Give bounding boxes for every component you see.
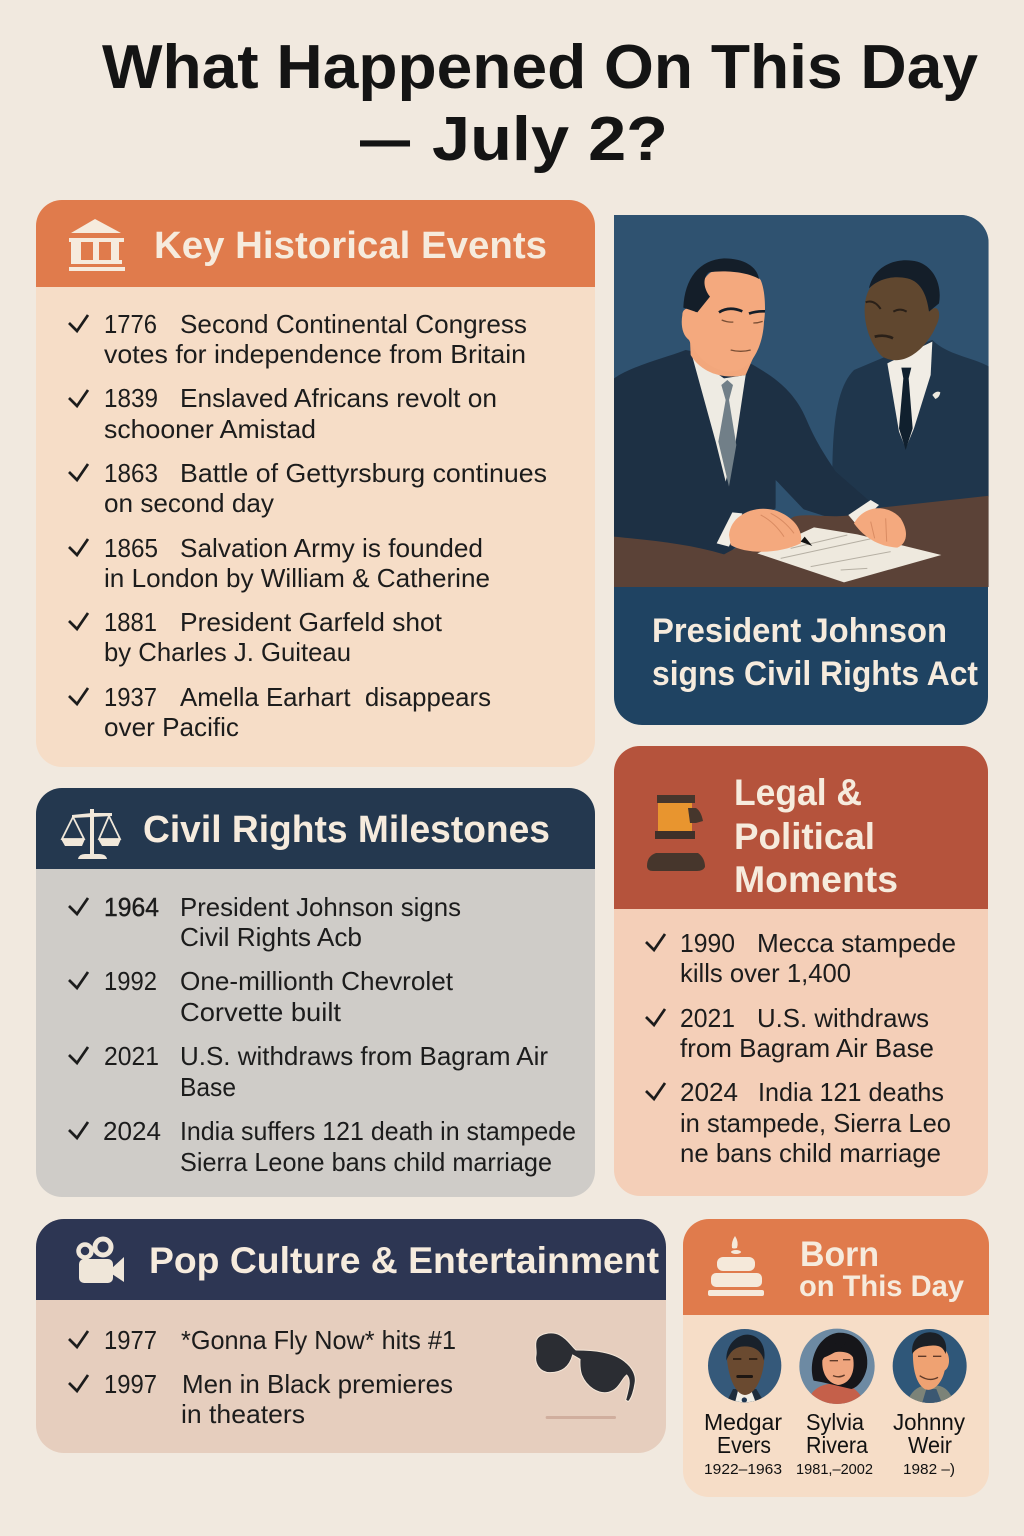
name: Johnny Weir: 1982 –) [903, 1461, 955, 1478]
panel header: key historical events [36, 200, 595, 287]
panel header: pop culture and entertainment [36, 1219, 666, 1300]
event list: civil rights milestones: Corvette built [180, 997, 342, 1027]
event list: key historical events: 1839 [104, 383, 158, 413]
panel: pop culture and entertainment [36, 1219, 666, 1453]
name: Medgar Evers: Medgar [704, 1409, 782, 1435]
event list: key historical events: Battle of Gettyrsburg continues [180, 458, 547, 488]
title: What Happened On This Day [102, 33, 979, 102]
icon: film camera [78, 1239, 124, 1283]
heading: pop culture and entertainment: Pop Culture & Entertainment [149, 1240, 659, 1281]
table [614, 496, 989, 587]
heading: born on this day: Born [800, 1235, 879, 1274]
name: Sylvia Rivera: 1981,–2002 [796, 1461, 873, 1478]
heading: born on this day [799, 1235, 964, 1303]
event list: civil rights milestones: 2021 [104, 1041, 159, 1071]
portrait: Johnny Weir [891, 1327, 968, 1406]
event list: civil rights milestones: Civil Rights Acb [180, 922, 362, 952]
person: Sylvia Rivera [796, 1327, 876, 1478]
event list: pop culture: *Gonna Fly Now* hits #1 [181, 1325, 456, 1355]
heading: legal and political moments: Moments [734, 859, 898, 900]
heading: legal and political moments: Political [734, 816, 875, 857]
event list: legal and political moments [646, 928, 956, 1168]
title: — [360, 105, 410, 174]
right figure [832, 260, 989, 508]
event list: key historical events: President Garfeld shot [180, 607, 443, 637]
icon: scales of justice [61, 809, 121, 859]
event list: civil rights milestones: One-millionth Chevrolet [180, 966, 454, 996]
event list: key historical events: Salvation Army is founded [180, 533, 483, 563]
heading: key historical events: Key Historical Events [154, 225, 547, 267]
name: Sylvia Rivera: Sylvia [806, 1409, 864, 1435]
heading: legal and political moments: Legal & [734, 772, 862, 813]
event list: key historical events: 1776 [104, 309, 157, 339]
event list: key historical events: Enslaved Africans revolt on [180, 383, 497, 413]
event list: pop culture: in theaters [181, 1399, 305, 1429]
icon: sunglasses [536, 1333, 635, 1419]
document [757, 527, 941, 582]
portrait: Sylvia Rivera [798, 1327, 876, 1406]
event list: pop culture: Men in Black premieres [182, 1369, 453, 1399]
event list: legal and political moments: Mecca stampede [757, 928, 956, 958]
event list: key historical events: schooner Amistad [104, 414, 316, 444]
panel: key historical events [36, 200, 595, 767]
person: Johnny Weir [891, 1327, 968, 1478]
event list: key historical events: by Charles J. Guiteau [104, 637, 351, 667]
event list: civil rights milestones: 2024 [103, 1116, 161, 1146]
event list: civil rights milestones: India suffers 121 death in stampede [180, 1116, 576, 1146]
panel: legal and political moments [614, 746, 988, 1196]
heading: legal and political moments [734, 772, 898, 900]
panel: civil rights act illustration [614, 215, 989, 725]
hands and pen [717, 500, 906, 552]
event list: civil rights milestones: President Johnson signs [180, 892, 461, 922]
heading: born on this day: on This Day [799, 1270, 964, 1303]
event list: legal and political moments: kills over 1,400 [680, 958, 851, 988]
heading: civil rights milestones: Civil Rights Milestones [143, 809, 550, 851]
event list: key historical events: votes for independence from Britain [104, 339, 526, 369]
event list: legal and political moments: ne bans child marriage [680, 1138, 941, 1168]
illustration: president signing the act [614, 215, 989, 587]
title [102, 33, 979, 174]
icon: gavel [647, 795, 705, 871]
event list: pop culture: 1997 [104, 1369, 157, 1399]
event list: legal and political moments: 1990 [680, 928, 735, 958]
event list: civil rights milestones: Base [180, 1072, 236, 1102]
name: Medgar Evers: 1922–1963 [704, 1461, 782, 1478]
event list: key historical events: over Pacific [104, 712, 239, 742]
name: Johnny Weir [893, 1409, 965, 1478]
event list: legal and political moments: 2021 [680, 1003, 735, 1033]
caption: signs Civil Rights Act [652, 655, 978, 693]
event list: civil rights milestones: 1964 [104, 892, 159, 922]
left figure [614, 258, 874, 555]
caption: President Johnson [652, 612, 947, 650]
event list: civil rights milestones: U.S. withdraws from Bagram Air [180, 1041, 548, 1071]
icon: birthday cake [708, 1236, 764, 1296]
event list: pop culture [69, 1325, 456, 1429]
name: Sylvia Rivera [796, 1409, 873, 1478]
name: Johnny Weir: Johnny [893, 1409, 965, 1435]
name: Johnny Weir: Weir [908, 1432, 952, 1458]
event list: legal and political moments: U.S. withdraws [757, 1003, 929, 1033]
name: Sylvia Rivera: Rivera [806, 1432, 868, 1458]
event list: key historical events: 1865 [104, 533, 158, 563]
event list: civil rights milestones [69, 892, 576, 1177]
name: Medgar Evers: Evers [717, 1432, 771, 1458]
panel header: legal and political moments [614, 746, 988, 909]
caption [652, 612, 978, 693]
event list: legal and political moments: in stampede, Sierra Leo [680, 1108, 951, 1138]
event list: key historical events: 1863 [104, 458, 158, 488]
panel: civil rights milestones [36, 788, 595, 1197]
panel: born on this day [683, 1219, 989, 1497]
event list: key historical events: on second day [104, 488, 274, 518]
event list: legal and political moments: 2024 [680, 1077, 738, 1107]
portrait: Medgar Evers [708, 1329, 782, 1402]
panel header: born on this day [683, 1219, 989, 1315]
person: Medgar Evers [704, 1327, 783, 1478]
event list: legal and political moments: from Bagram Air Base [680, 1033, 934, 1063]
title: July 2? [432, 105, 668, 174]
event list: key historical events: 1937 [104, 682, 157, 712]
event list: civil rights milestones: 1992 [104, 966, 157, 996]
event list: key historical events: in London by William & Catherine [104, 563, 490, 593]
event list: civil rights milestones: Sierra Leone bans child marriage [180, 1147, 552, 1177]
event list: key historical events: 1881 [104, 607, 157, 637]
event list: key historical events [69, 309, 547, 742]
icon: classical building [69, 219, 125, 271]
panel header: civil rights milestones [36, 788, 595, 869]
name: Medgar Evers [704, 1409, 782, 1478]
event list: legal and political moments: India 121 deaths [758, 1077, 944, 1107]
event list: pop culture: 1977 [104, 1325, 157, 1355]
event list: key historical events: Second Continental Congress [180, 309, 527, 339]
event list: key historical events: Amella Earhart disappears [180, 682, 491, 712]
